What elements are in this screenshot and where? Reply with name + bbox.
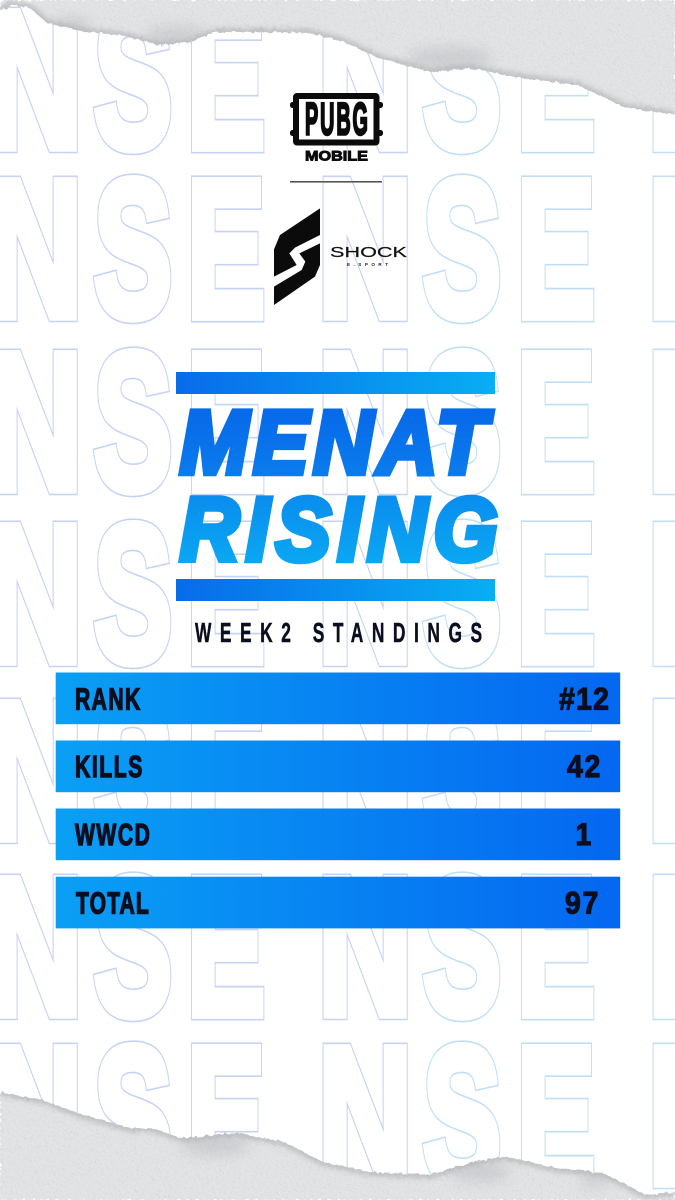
subtitle: WEEK2 STANDINGS [195, 617, 482, 648]
background: outlined NSE lettering pattern: E [187, 485, 265, 703]
logo: PUBG Mobile: PUBG [305, 96, 368, 145]
background: outlined NSE lettering pattern: E [187, 838, 265, 1056]
background: outlined NSE lettering pattern: E [517, 313, 595, 531]
background: outlined NSE lettering pattern: S [94, 838, 172, 1056]
background: outlined NSE lettering pattern: S [94, 313, 172, 531]
row: wwcd [56, 808, 620, 860]
logo: Shock E.Sport: SHOCK [330, 245, 407, 261]
background: outlined NSE lettering pattern: N [318, 486, 412, 703]
background: outlined NSE lettering pattern: S [94, 662, 172, 880]
background: outlined NSE lettering pattern: E [517, 140, 595, 358]
background: outlined NSE lettering pattern: S [423, 313, 501, 531]
title: RISING: RISING [180, 481, 497, 580]
background: outlined NSE lettering pattern: S [94, 140, 172, 358]
row: kills: 42 [567, 750, 600, 784]
background: outlined NSE lettering pattern: E [517, 485, 595, 703]
logo: Shock E.Sport [274, 208, 407, 305]
background: outlined NSE lettering pattern: S [423, 140, 501, 358]
top bar [176, 372, 495, 394]
background: outlined NSE lettering pattern: S [94, 662, 172, 880]
row: rank [56, 672, 620, 724]
divider line [290, 181, 382, 183]
torn paper: bottom [0, 1090, 675, 1200]
title: MENAT: MENAT [180, 394, 493, 493]
background: outlined NSE lettering pattern: E [517, 838, 595, 1056]
background: outlined NSE lettering pattern: E [517, 313, 595, 531]
background: outlined NSE lettering pattern: E [187, 313, 265, 531]
background: outlined NSE lettering pattern: S [423, 313, 501, 531]
background: outlined NSE lettering pattern: N [318, 141, 412, 358]
logo: PUBG Mobile: MOBILE [305, 148, 368, 164]
row: wwcd: WWCD [75, 817, 150, 852]
background: outlined NSE lettering pattern: S [423, 838, 501, 1056]
background: outlined NSE lettering pattern: S [94, 485, 172, 703]
row: total: TOTAL [76, 885, 149, 921]
background: outlined NSE lettering pattern: S [423, 485, 501, 703]
background: outlined NSE lettering pattern: E [187, 140, 265, 358]
background: outlined NSE lettering pattern: E [517, 838, 595, 1056]
background: outlined NSE lettering pattern: N [318, 839, 412, 1056]
icon: S mark [274, 208, 320, 305]
background: outlined NSE lettering pattern: E [187, 662, 265, 880]
background: outlined NSE lettering pattern: S [423, 662, 501, 880]
background: outlined NSE lettering pattern: N [318, 486, 412, 703]
logo: PUBG Mobile [290, 96, 383, 164]
row: rank: RANK [75, 681, 140, 716]
row: rank: #12 [559, 682, 609, 717]
background: outlined NSE lettering pattern: E [517, 140, 595, 358]
row: wwcd: 1 [576, 818, 591, 852]
title banner [176, 372, 497, 601]
row: kills: KILLS [75, 749, 142, 784]
logo: Shock E.Sport: E.SPORT [347, 262, 388, 267]
background: outlined NSE lettering pattern: S [423, 140, 501, 358]
background: outlined NSE lettering pattern: S [423, 662, 501, 880]
row: total: 97 [565, 886, 598, 921]
background: outlined NSE lettering pattern: E [187, 485, 265, 703]
background: outlined NSE lettering pattern: N [318, 839, 412, 1056]
row: total [56, 877, 620, 928]
background: outlined NSE lettering pattern: N [318, 314, 412, 531]
background: outlined NSE lettering pattern: S [94, 313, 172, 531]
background: outlined NSE lettering pattern: N [318, 663, 412, 880]
background: outlined NSE lettering pattern: S [94, 485, 172, 703]
background: outlined NSE lettering pattern: E [187, 838, 265, 1056]
background: outlined NSE lettering pattern: S [94, 838, 172, 1056]
background: outlined NSE lettering pattern: E [517, 662, 595, 880]
row: kills [56, 740, 620, 792]
background: outlined NSE lettering pattern: N [318, 314, 412, 531]
background: outlined NSE lettering pattern: E [517, 485, 595, 703]
background: outlined NSE lettering pattern: E [187, 313, 265, 531]
background: outlined NSE lettering pattern: S [423, 838, 501, 1056]
background: outlined NSE lettering pattern: S [94, 140, 172, 358]
background: outlined NSE lettering pattern: E [187, 140, 265, 358]
torn paper: top [0, 0, 675, 120]
background: outlined NSE lettering pattern: N [318, 663, 412, 880]
background: outlined NSE lettering pattern: N [318, 141, 412, 358]
background: outlined NSE lettering pattern: E [187, 662, 265, 880]
background: outlined NSE lettering pattern: S [423, 485, 501, 703]
background: outlined NSE lettering pattern: E [517, 662, 595, 880]
bottom bar [176, 579, 495, 601]
